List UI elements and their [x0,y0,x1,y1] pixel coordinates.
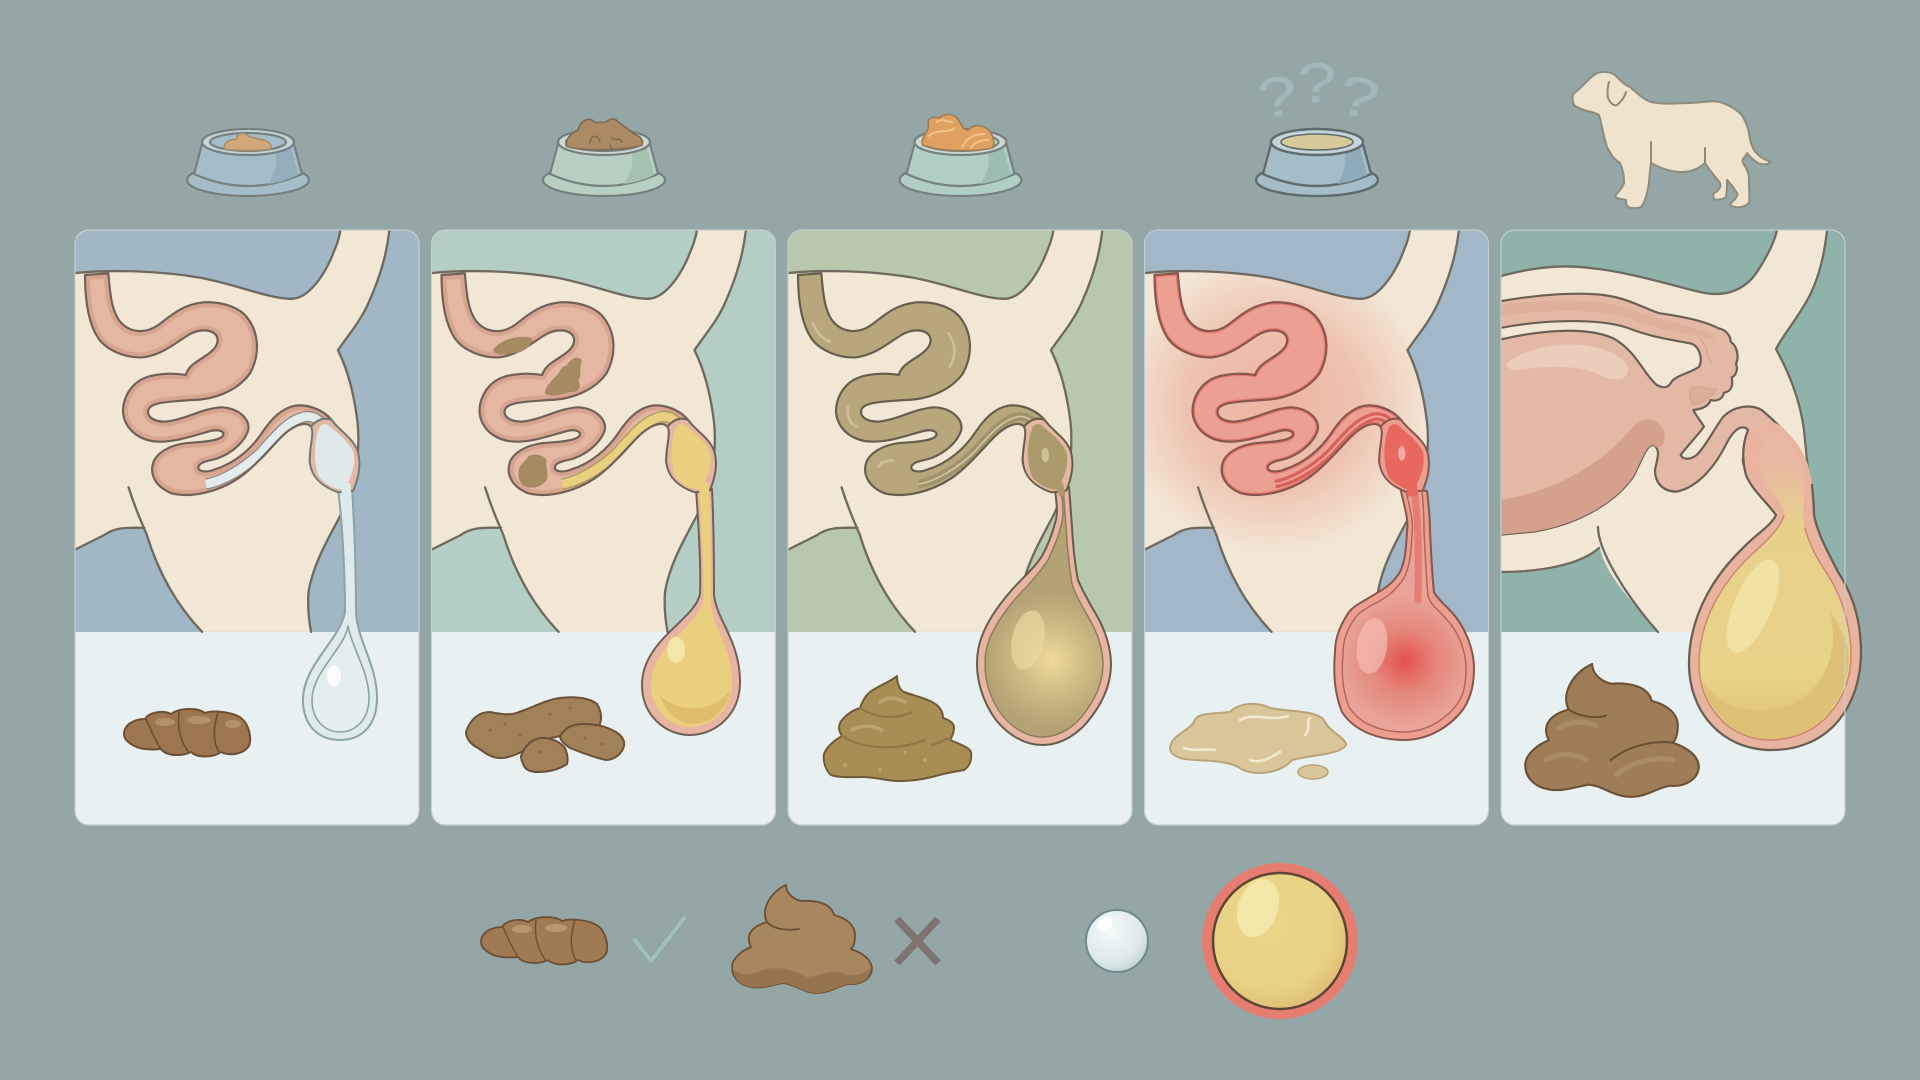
fluid sac [1689,422,1861,750]
enlarged stomach and tube [1498,294,1787,535]
legend: large soft stool [732,885,872,993]
intestine [798,273,1065,495]
stool: crumbly chunks [466,697,624,772]
bulb [1379,419,1429,496]
fluid sac [1334,487,1474,740]
bulb [310,419,359,496]
stool: soft mound [824,676,971,781]
body [1501,230,1827,632]
fluid sac [977,487,1111,745]
stool: watery puddle [1170,704,1346,779]
panel 3: olive murky gut [788,230,1132,825]
question marks: ? [1332,63,1385,133]
icon: check mark [634,917,685,961]
fluid sac [642,489,740,735]
stool: large soft mound [1525,664,1699,797]
legend: small white globule [1086,910,1148,972]
legend: large yellow globule with red wall [1202,863,1358,1019]
panel 5: enlarged stomach and large sac [1498,230,1861,825]
question marks [1254,53,1385,133]
icon: cross mark [897,919,938,963]
intestine [1154,273,1421,495]
inflammation halo [1145,274,1414,540]
panel 1: healthy, white fluid [75,230,419,825]
question marks: ? [1298,53,1336,114]
icon: bowl of fluid with question marks [1254,53,1385,196]
icon: bowl with small portion of food [187,129,309,196]
icon: overweight dog [1572,72,1771,208]
question marks: ? [1254,64,1301,131]
panel 4: inflamed red gut [1118,230,1488,825]
intestine [85,273,352,495]
stool: small log [124,709,250,756]
bulb [666,419,716,496]
panel 2: fatty fluid, undigested food [431,230,776,825]
intestine with food lumps [441,273,708,495]
fluid sac [303,488,377,740]
legend: small log stool [481,917,607,964]
bulb [1023,419,1072,496]
icon: bowl with orange chunks [900,114,1022,196]
icon: bowl with kibble heap [543,119,665,196]
